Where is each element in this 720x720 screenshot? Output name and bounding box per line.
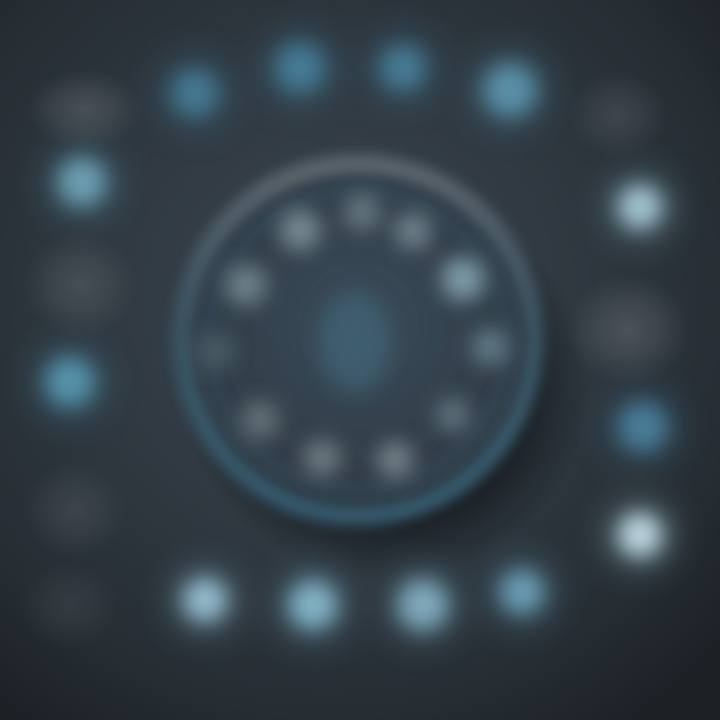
dial drop shadow (180, 190, 590, 580)
blue glow dots: bottom row (184, 571, 543, 629)
glow halos behind dots (36, 34, 677, 639)
blue glow dots: top row (173, 45, 535, 115)
central dial (182, 164, 534, 516)
gray blobs: left and right columns (20, 70, 690, 649)
dial centre marker (319, 292, 391, 392)
blue glow dots: left column (47, 159, 105, 405)
blue glow dots: right column (619, 186, 666, 556)
dial inner ring (208, 190, 508, 490)
dial markers (196, 193, 509, 479)
dial outer ring (182, 164, 534, 516)
dial disc (186, 168, 530, 512)
